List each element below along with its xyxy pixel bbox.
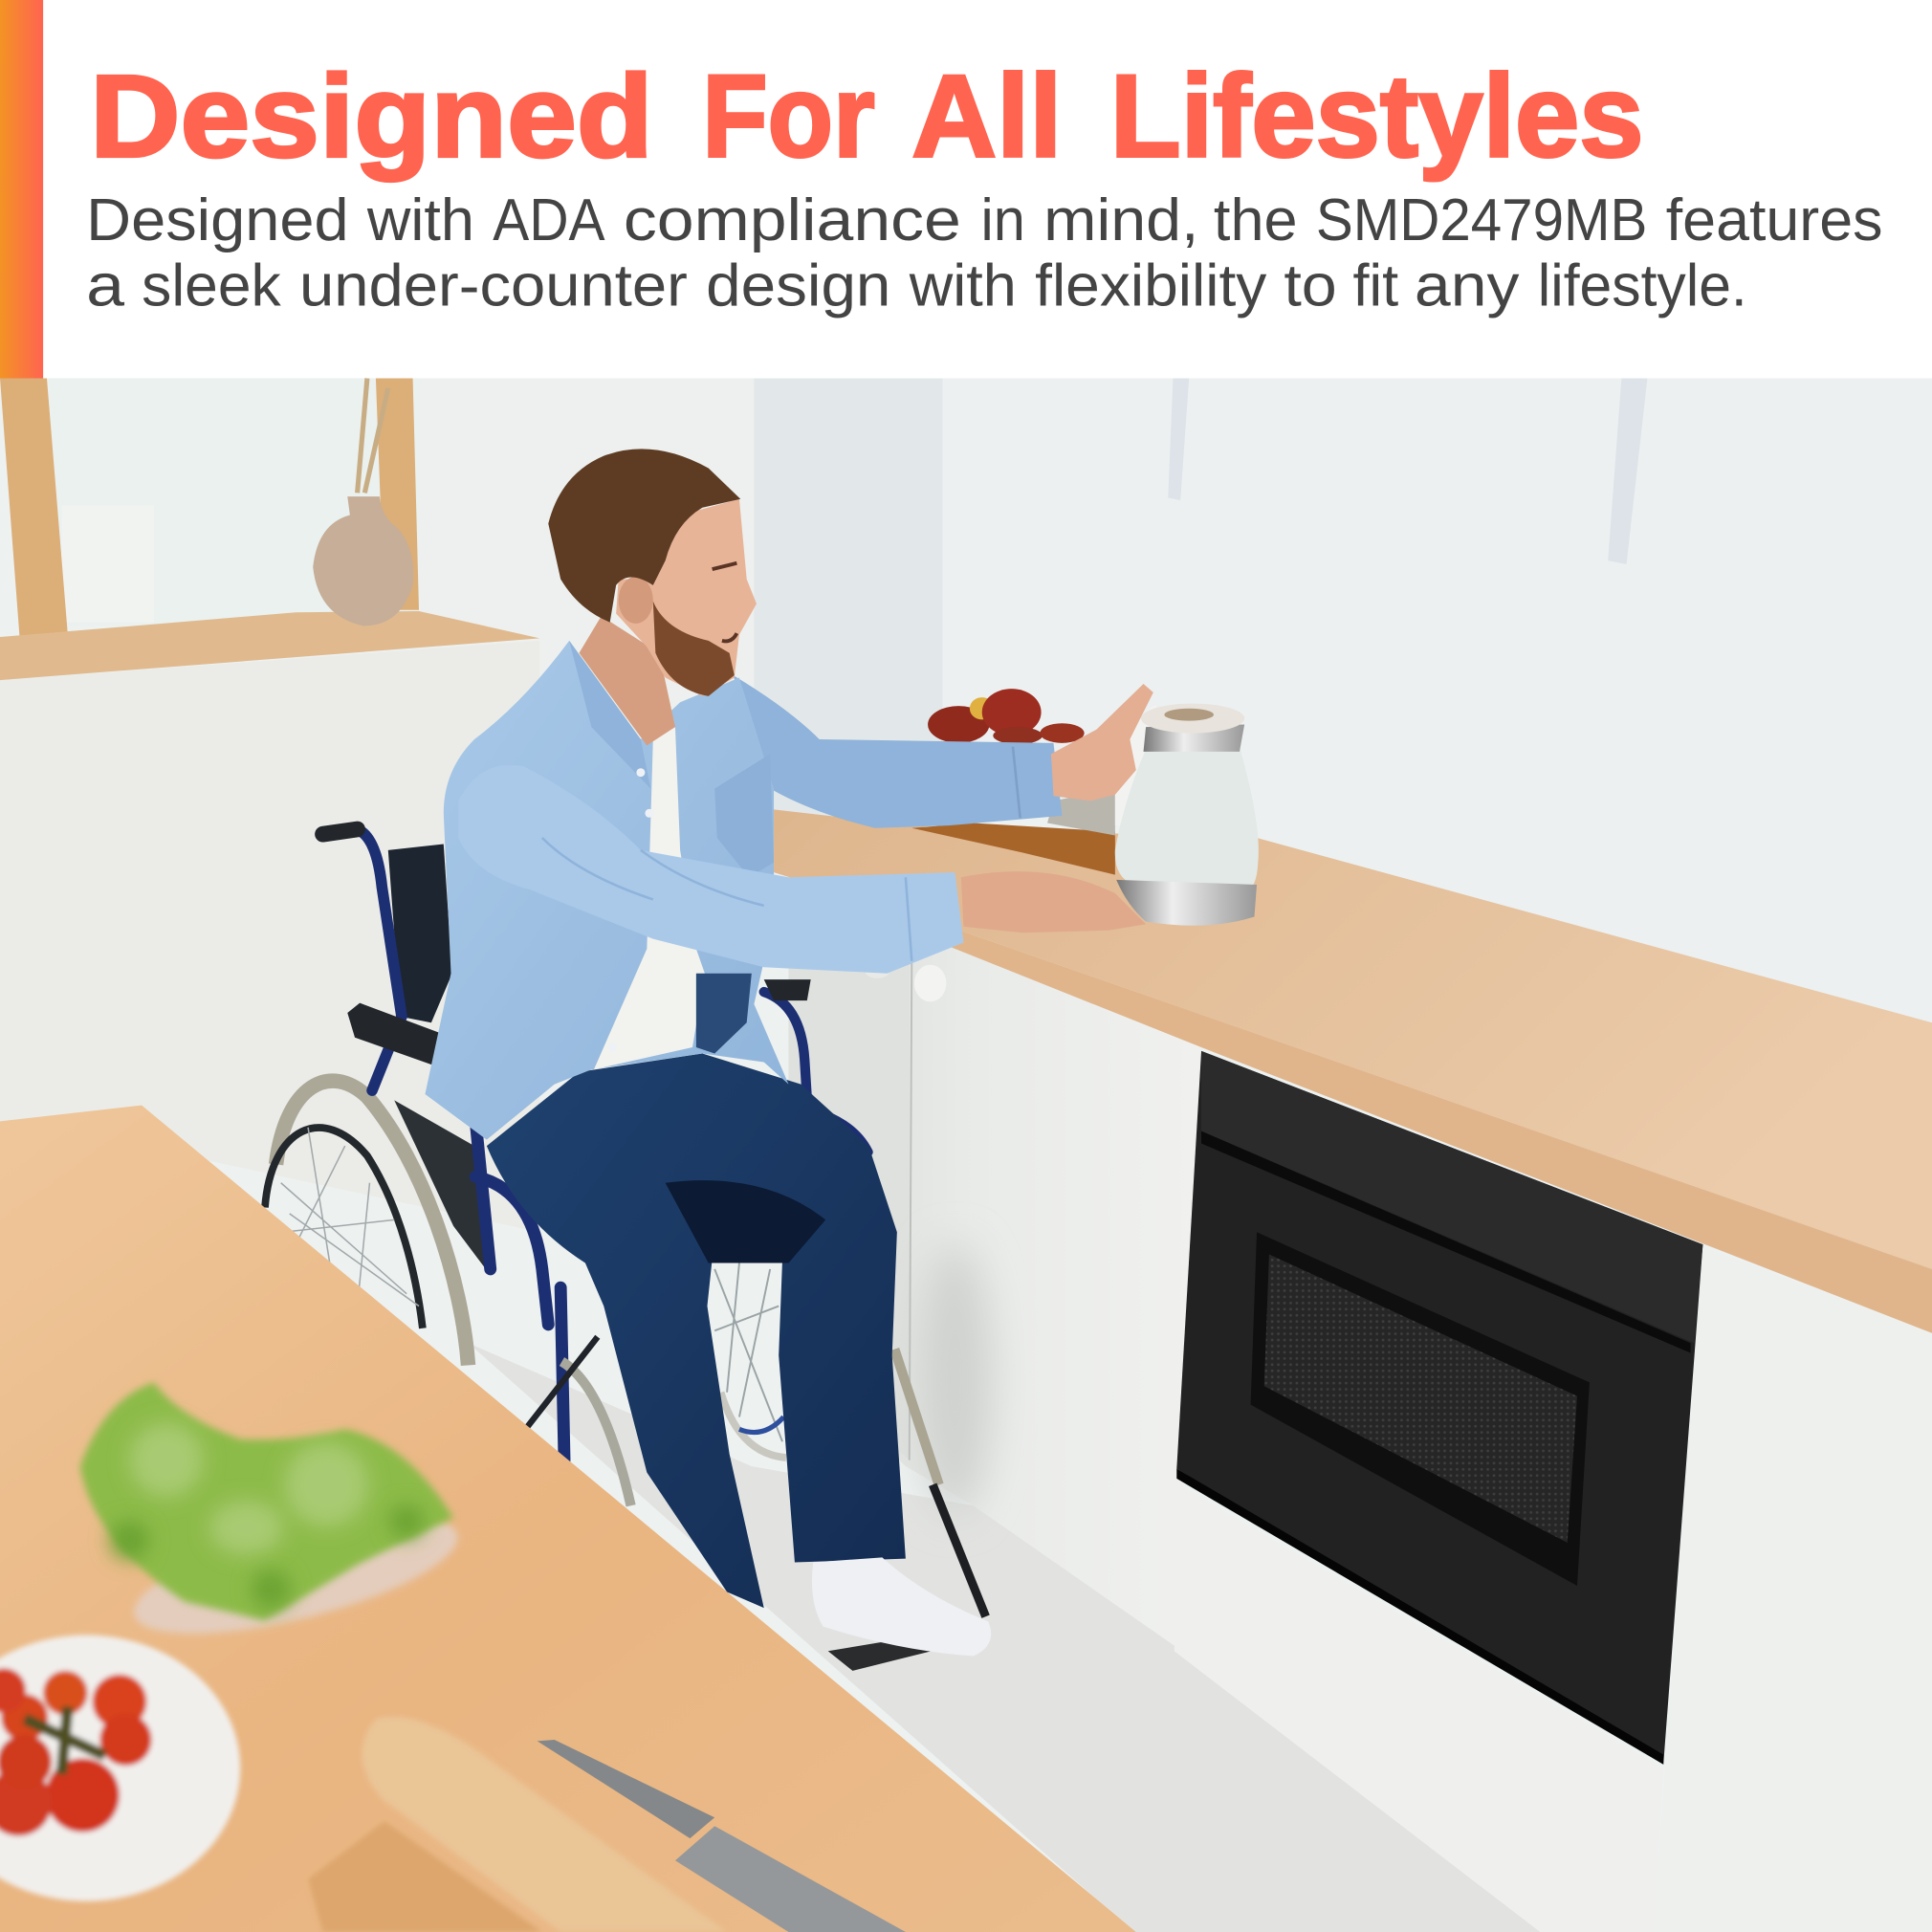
foreground table [0, 1106, 1136, 1932]
subtitle: lifestyle. [1538, 252, 1747, 318]
ear [619, 577, 653, 624]
silver struts and footrest [561, 1362, 631, 1505]
subtitle: a [86, 252, 125, 318]
subtitle: in [980, 187, 1025, 253]
backrest [388, 844, 452, 1022]
fruit and wooden tray [911, 689, 1115, 875]
front sleeve [458, 765, 963, 974]
beard [653, 602, 735, 696]
armrests [347, 1003, 462, 1065]
push handle [323, 829, 358, 834]
half wall with wood shelf [0, 641, 539, 1232]
subtitle: with [909, 252, 1017, 318]
frame tubes [330, 830, 868, 1460]
side guard [394, 1100, 491, 1275]
shirt buttons [608, 768, 653, 1052]
back sleeve [734, 675, 1062, 828]
knife [538, 1740, 906, 1932]
header band [0, 0, 1932, 378]
title: All [911, 51, 1062, 182]
subtitle: compliance [624, 187, 961, 253]
kettle [1115, 704, 1259, 926]
oven window [1251, 1232, 1590, 1586]
far wheel [714, 1262, 786, 1458]
tomato plate [0, 1636, 240, 1901]
wheelchair [265, 829, 986, 1671]
subtitle: design [706, 252, 890, 318]
hands [961, 871, 1146, 933]
eye and smile [713, 563, 736, 641]
title: Lifestyles [1110, 51, 1644, 182]
neck [579, 616, 675, 745]
window frame [0, 378, 419, 638]
subtitle: sleek [142, 252, 281, 318]
subtitle: features [1666, 187, 1882, 253]
shirt pocket [714, 754, 774, 877]
man seated in wheelchair [425, 449, 1153, 1656]
shirt collar [569, 641, 650, 788]
subtitle: any [1415, 252, 1520, 318]
subtitle: with [366, 187, 474, 253]
salad plate [80, 1382, 468, 1658]
title: Designed [90, 51, 653, 182]
shadow of the wheelchair on the cabinet [918, 1244, 992, 1516]
subtitle: mind, [1043, 187, 1198, 253]
subtitle: flexibility [1035, 252, 1266, 318]
rear wheel [265, 1081, 469, 1365]
subtitle: fit [1353, 252, 1398, 318]
floor [469, 1343, 1577, 1932]
title: For [702, 51, 875, 182]
vase [313, 378, 413, 626]
subtitle: Designed [86, 187, 349, 253]
subtitle: to [1284, 252, 1337, 318]
sock [812, 1557, 991, 1656]
cutting board and bread [308, 1717, 727, 1932]
wall shelf brackets [1168, 378, 1647, 564]
subtitle: under-counter [299, 252, 688, 318]
countertop [774, 809, 1932, 1333]
gradient accent bar [0, 0, 43, 378]
microwave drawer oven [1176, 1051, 1702, 1765]
cabinets [788, 939, 1932, 1932]
jeans [487, 1053, 906, 1608]
subtitle: SMD2479MB [1316, 187, 1647, 253]
t-shirt [594, 727, 705, 1069]
face [616, 499, 757, 696]
subtitle: the [1214, 187, 1298, 253]
torso shirt [425, 641, 788, 1140]
subtitle: ADA [493, 187, 605, 253]
hair [548, 449, 740, 623]
